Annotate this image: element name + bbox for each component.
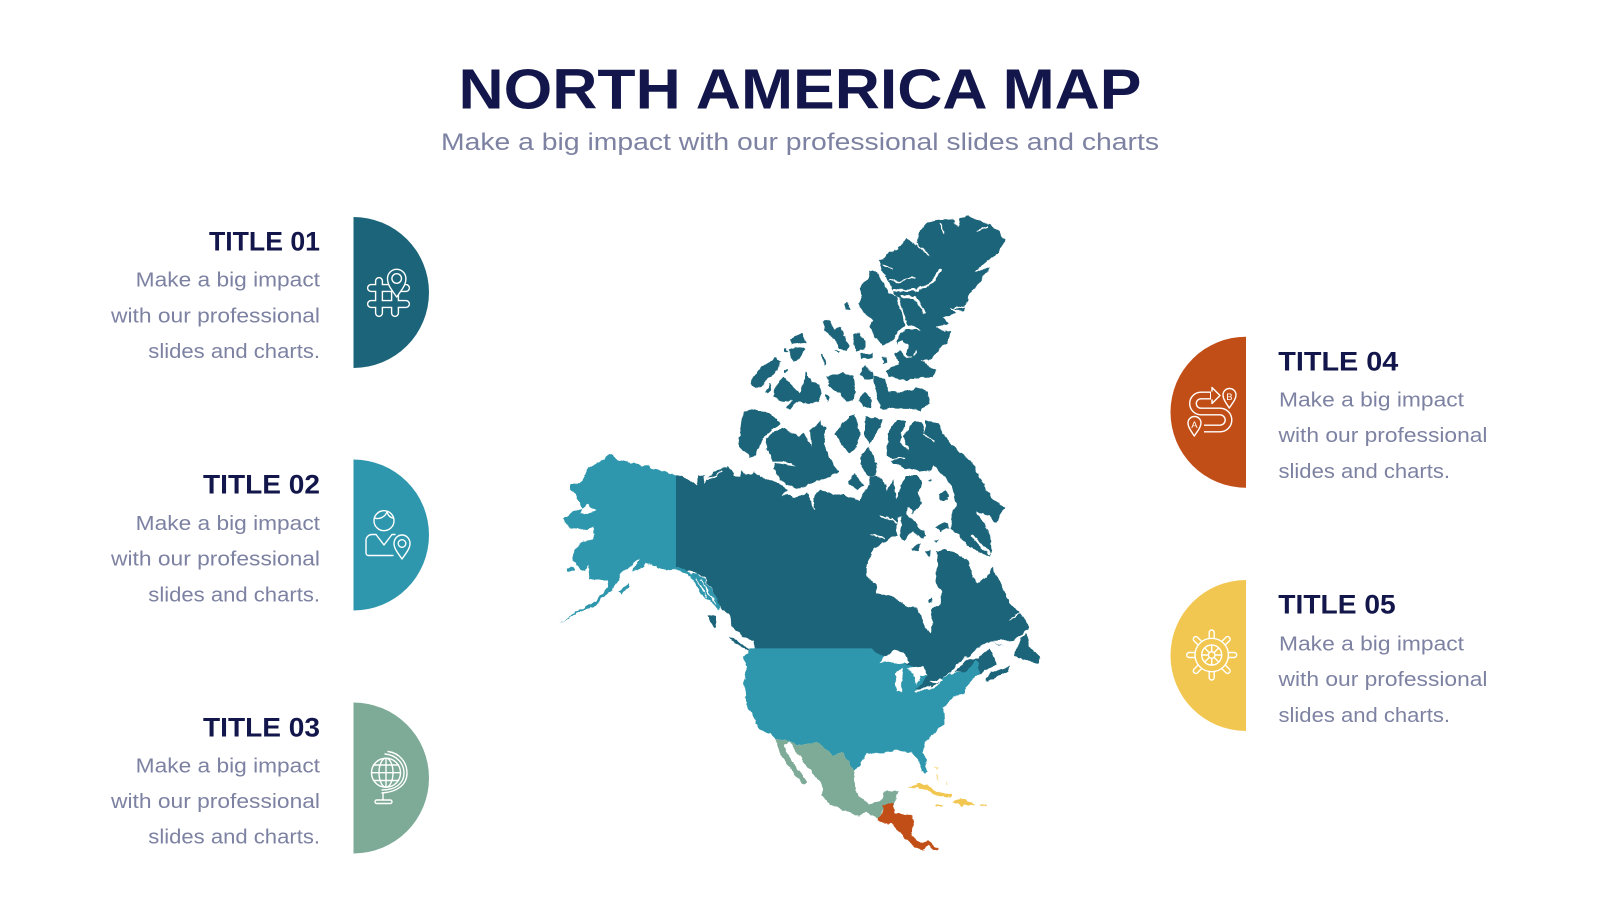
icon: route A to B [1188,388,1236,436]
icon: globe [372,752,407,804]
body 04: slides and charts. [1278,461,1450,483]
body 04 [1277,389,1488,483]
icon: route A to B: B [1226,392,1233,403]
panel 02 [110,460,429,610]
body 03: with our professional [110,791,320,813]
body 03: slides and charts. [148,827,320,849]
region: United States [743,648,980,774]
half circle 01 [354,217,429,368]
heading 05: TITLE 05 [1278,589,1396,619]
heading 02: TITLE 02 [203,470,320,500]
body 02: slides and charts. [148,584,320,606]
panel 05 [1170,580,1488,731]
half circle 04 [1170,337,1246,488]
body 05: Make a big impact [1279,633,1465,655]
icon: map grid with pin [371,269,406,313]
body 02: with our professional [110,549,320,571]
half circle 05 [1170,580,1246,731]
half circle 02 [354,460,429,610]
panel 03 [110,702,429,854]
body 05 [1277,633,1488,727]
half circle 03 [354,702,429,854]
body 01: slides and charts. [148,341,320,363]
panel 04 [1170,337,1488,488]
region: Mexico [775,738,899,818]
heading 03: TITLE 03 [203,712,320,742]
region: Central America [877,803,938,851]
region: Alaska [560,454,721,623]
body 04: with our professional [1277,425,1488,447]
body 03 [110,755,321,849]
region: Caribbean [908,767,987,807]
body 02: Make a big impact [136,513,321,535]
heading 01: TITLE 01 [209,227,320,257]
body 01: Make a big impact [136,270,321,292]
body 02 [110,513,321,606]
heading 04: TITLE 04 [1278,347,1399,377]
icon: ship wheel [1187,630,1237,680]
title: NORTH AMERICA MAP [458,58,1142,122]
body 01 [110,270,321,363]
body 03: Make a big impact [136,755,321,777]
body 05: slides and charts. [1278,705,1450,727]
region: Canada [672,216,1040,690]
body 04: Make a big impact [1279,389,1465,411]
icon: route A to B: A [1191,420,1198,431]
map: North America [560,216,1040,851]
body 01: with our professional [110,305,320,327]
body 05: with our professional [1277,669,1488,691]
subtitle: Make a big impact with our professional slides and charts [441,129,1159,156]
icon: person with pin [366,511,410,559]
panel 01 [110,217,429,368]
